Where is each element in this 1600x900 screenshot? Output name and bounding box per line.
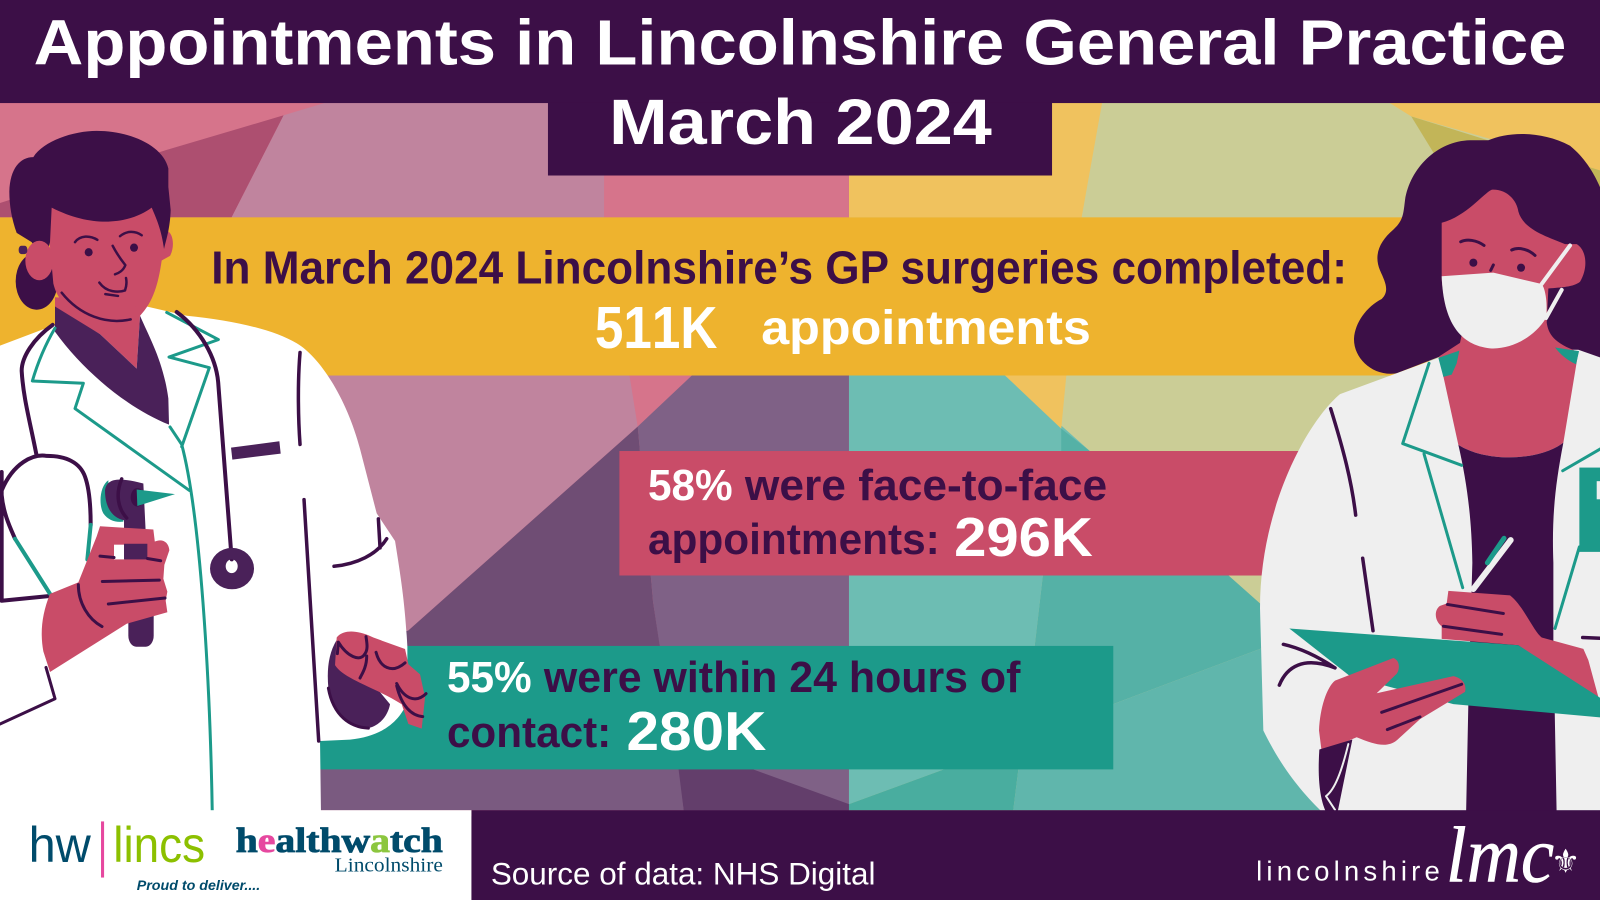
logo: hw lincs [29,817,260,894]
logo: lincolnshire lmc: lmc [1446,812,1554,900]
logo: healthwatch Lincolnshire: Lincolnshire [335,854,443,876]
text: total appointments: appointments [761,302,1091,355]
footer: logo panel [0,810,471,900]
text: total appointments: 511K [595,294,718,361]
footer bar [471,810,1600,900]
logo: healthwatch Lincolnshire: healthw atch [236,821,443,860]
illustration: female doctor with mask and clipboard [1260,134,1600,817]
text: face-to-face stat: appointments: [648,515,940,564]
title bar: Appointments in Lincolnshire General Practice [34,6,1566,78]
logo: lincolnshire lmc [1256,812,1580,900]
logo: lincolnshire lmc: lincolnshire [1256,856,1440,887]
logo: healthwatch Lincolnshire [236,821,443,876]
logo: hw lincs: hw [29,817,92,873]
logo: hw lincs: Proud to deliver.... [137,878,260,894]
text: face-to-face stat [648,461,1107,568]
text: within 24 hours stat: were within 24 hours of [543,653,1021,702]
background: faceted colour panels [0,102,1600,816]
title bar: March 2024 [609,86,992,158]
text: face-to-face stat: were face-to-face [744,461,1107,510]
band: yellow total appointments [0,217,1429,376]
text: total appointments: In March 2024 Lincolnshire’s GP surgeries completed: [211,242,1347,294]
illustration: male doctor with otoscope [0,131,426,817]
title bar [0,0,1600,176]
text: face-to-face stat: 296K [954,506,1093,568]
text: total appointments [211,242,1347,361]
text: within 24 hours stat [447,653,1021,762]
text: within 24 hours stat: contact: [447,708,611,757]
text: within 24 hours stat: 280K [627,700,767,762]
text: face-to-face stat: 58% [648,461,733,510]
text: within 24 hours stat: 55% [447,653,532,702]
logo: lincolnshire lmc: ⚜ [1551,842,1580,880]
logo: hw lincs: lincs [113,817,205,873]
band: teal within 24 hours [306,646,1113,769]
band: pink face-to-face [619,451,1323,576]
source note: Source of data: NHS Digital [491,856,876,892]
